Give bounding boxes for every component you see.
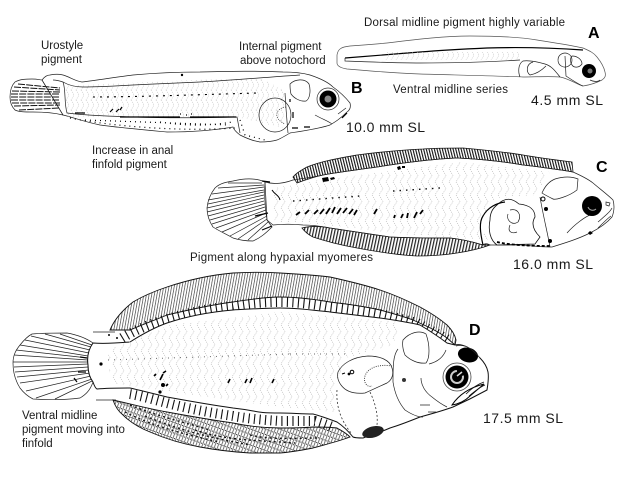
label: dorsal midline: Dorsal midline pigment highly variable — [364, 17, 565, 29]
fish D caudal fin — [13, 333, 93, 400]
letter C: C — [596, 159, 608, 176]
fish D myomeres — [108, 312, 400, 412]
letter A: A — [588, 25, 600, 42]
letter B: B — [351, 80, 363, 97]
fish B caudal rays — [11, 84, 60, 110]
label: ventral midline into finfold: finfold — [22, 438, 53, 450]
fish A gut — [519, 61, 560, 77]
fish D abdomen contour — [337, 390, 377, 434]
size D: 17.5 mm SL — [483, 410, 563, 426]
fish D upper eye — [455, 344, 481, 366]
fish D peduncle — [93, 332, 116, 400]
fish D dorsal pterygiophore band — [122, 302, 450, 341]
fish A head and eye — [558, 53, 600, 86]
fish A finfold outline — [337, 36, 605, 86]
label: ventral midline into finfold: pigment moving into — [22, 424, 125, 436]
fish C caudal rays — [207, 183, 268, 240]
fish D dorsal fin — [110, 272, 456, 345]
label: ventral midline into finfold: Ventral midline — [22, 410, 97, 422]
fish D: 17.5 mm juvenile — [13, 272, 488, 453]
fish A: 4.5 mm larva — [337, 36, 605, 86]
fish D midline and pigment — [108, 354, 345, 360]
fish D pectoral fin — [338, 356, 393, 393]
fish B: 10.0 mm larva — [10, 71, 350, 142]
label: internal pigment: Internal pigment — [239, 41, 321, 53]
label: internal pigment: above notochord — [240, 55, 326, 67]
fish B body contour and pigment — [53, 75, 300, 87]
fish D caudal rays — [13, 334, 92, 399]
fish D anal fin — [113, 400, 350, 453]
fish B pectoral fin — [259, 98, 291, 132]
fish C body — [265, 158, 614, 247]
fish C head and eye — [540, 177, 612, 247]
fish D pelvic fin — [361, 424, 385, 440]
label: anal finfold: Increase in anal — [92, 145, 173, 157]
fish C: 16.0 mm larva — [207, 148, 614, 256]
size A: 4.5 mm SL — [531, 92, 603, 108]
label: anal finfold: finfold pigment — [92, 159, 168, 171]
size C: 16.0 mm SL — [513, 256, 593, 272]
fish C myomeres — [272, 162, 550, 240]
fish D body — [88, 308, 488, 438]
label: hypaxial: Pigment along hypaxial myomeres — [190, 252, 373, 264]
fish D anal pterygiophore band — [130, 394, 335, 428]
fish D anal fin pigment — [125, 405, 320, 445]
fish D operculum and head — [393, 349, 423, 417]
fish B body myomeres — [65, 78, 285, 128]
fish B caudal fin — [10, 79, 63, 115]
label: urostyle pigment: pigment — [41, 54, 83, 66]
fish B head and eye — [285, 80, 346, 133]
label: urostyle pigment: Urostyle — [41, 40, 83, 52]
fish D lower eye — [443, 363, 471, 391]
fish C anal fin — [302, 226, 490, 256]
fish C midline and pigment — [293, 188, 440, 201]
fish C dorsal fin — [293, 148, 573, 183]
size B: 10.0 mm SL — [346, 119, 425, 135]
fish A notochord and midline pigment — [345, 48, 583, 58]
fish C pectoral and gut — [489, 199, 540, 245]
letter D: D — [469, 322, 481, 339]
label: ventral midline series: Ventral midline series — [393, 84, 508, 96]
fish B body outline — [42, 71, 350, 142]
fish C caudal fin — [207, 179, 272, 241]
